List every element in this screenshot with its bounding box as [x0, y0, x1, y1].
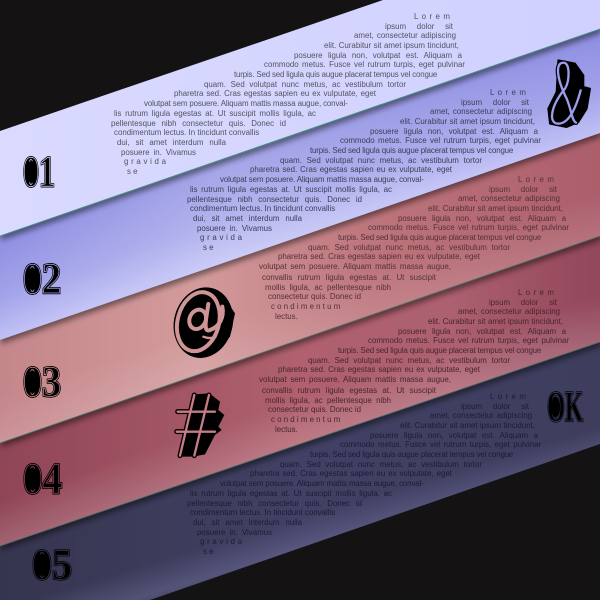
number 03: 03	[23, 359, 61, 406]
text block: band 3: pharetra sed. Cras egestas sapien eu ex vulputate, eget	[278, 252, 480, 261]
text block: band 1: ipsum dolor sit	[385, 22, 453, 31]
text block: band 3: amet, consectetur adipiscing	[458, 194, 560, 203]
text block: band 1: dui, sit amet interdum nulla	[117, 138, 226, 147]
icon: ampersand	[548, 60, 590, 127]
text block: band 4: amet, consectetur adipiscing	[458, 307, 560, 316]
text block: band 2: elit. Curabitur sit amet ipsum tincidunt,	[400, 117, 535, 126]
text block: band 3: commodo metus. Fusce vel rutrum turpis, eget pulvinar	[368, 223, 569, 232]
text block: band 2: posuere ligula non, volutpat est. Aliquam a	[370, 127, 538, 136]
text block: band 4: quam. Sed volutpat nunc metus, ac vestibulum tortor	[308, 356, 510, 365]
text block: band 4: L o r e m	[518, 288, 554, 297]
number 01: 01	[23, 149, 55, 196]
text block: band 3: turpis. Sed sed ligula quis augue placerat tempus vel congue	[338, 233, 541, 242]
text block: band 2: s e	[203, 243, 214, 252]
text block: band 5	[187, 392, 541, 556]
number 05: 05	[32, 542, 72, 589]
text block: band 5: amet, consectetur adipiscing	[430, 411, 532, 420]
text block: band 1: posuere in. Vivamus	[121, 148, 196, 156]
text block: band 2: pharetra sed. Cras egestas sapien eu ex vulputate, eget	[250, 165, 452, 174]
text block: band 5: posuere ligula non, volutpat est. Aliquam a	[370, 431, 538, 440]
text block: band 3: L o r e m	[518, 175, 554, 184]
text block: band 5: s e	[203, 547, 214, 556]
text block: band 4: commodo metus. Fusce vel rutrum turpis, eget pulvinar	[368, 336, 569, 345]
text block: band 2: L o r e m	[490, 88, 526, 97]
text block: band 1	[111, 12, 465, 176]
icon: hash sign	[177, 393, 224, 457]
text block: band 1: quam. Sed volutpat nunc metus, ac vestibulum tortor	[204, 80, 406, 89]
text block: band 2: pellentesque nibh consectetur quis. Donec id	[187, 194, 362, 204]
text block: band 1: pharetra sed. Cras egestas sapien eu ex vulputate, eget	[174, 89, 376, 98]
text block: band 5: pellentesque nibh consectetur quis. Donec id	[187, 498, 362, 508]
text block: band 5: ipsum dolor sit	[461, 402, 529, 411]
text block: band 1: pellentesque nibh consectetur quis. Donec id	[111, 118, 286, 128]
text block: band 5: elit. Curabitur sit amet ipsum tincidunt,	[400, 421, 535, 430]
text block: band 5: lis rutrum ligula egestas at. Ut suscipit mollis ligula, ac	[190, 489, 392, 498]
text block: band 4: convallis rutrum ligula egestas at. Ut suscipit	[262, 386, 436, 395]
text block: band 3: posuere ligula non, volutpat est. Aliquam a	[398, 214, 566, 223]
text block: band 2: commodo metus. Fusce vel rutrum turpis, eget pulvinar	[340, 136, 541, 145]
text block: band 1: g r a v i d a	[124, 157, 166, 166]
text block: band 1: L o r e m	[414, 12, 450, 21]
number 01: 01	[23, 149, 55, 196]
text block: band 3: c o n d i m e n t u m	[271, 302, 340, 311]
text block: band 4: ipsum dolor sit	[489, 298, 557, 307]
text block: band 4: turpis. Sed sed ligula quis augue placerat tempus vel congue	[338, 346, 541, 355]
text block: band 1: lis rutrum ligula egestas at. Ut suscipit mollis ligula, ac	[114, 109, 316, 118]
number 04: 04	[23, 456, 62, 503]
text block: band 1: turpis. Sed sed ligula quis augue placerat tempus vel congue	[234, 70, 437, 79]
band 4	[0, 236, 600, 546]
text block: band 2: turpis. Sed sed ligula quis augue placerat tempus vel congue	[310, 146, 513, 155]
text block: band 5: g r a v i d a	[200, 537, 242, 546]
text block: band 4: pharetra sed. Cras egestas sapien eu ex vulputate, eget	[278, 365, 480, 374]
text block: band 3	[259, 175, 569, 320]
number 02: 02	[23, 256, 61, 303]
band 5	[0, 342, 600, 600]
text block: band 1: volutpat sem posuere. Aliquam mattis massa augue, conval-	[144, 99, 348, 108]
text block: band 2: ipsum dolor sit	[461, 98, 529, 107]
text block: band 3: mollis ligula, ac pellentesque nibh	[265, 282, 391, 292]
text block: band 1: s e	[127, 167, 138, 176]
text block: band 3: quam. Sed volutpat nunc metus, ac vestibulum tortor	[308, 243, 510, 252]
text block: band 5: L o r e m	[490, 392, 526, 401]
text block: band 3: consectetur quis. Donec id	[268, 292, 361, 301]
text block: band 3: convallis rutrum ligula egestas at. Ut suscipit	[262, 273, 436, 282]
text block: band 3: ipsum dolor sit	[489, 185, 557, 194]
text block: band 4: elit. Curabitur sit amet ipsum tincidunt,	[428, 317, 563, 326]
text block: band 4: lectus.	[275, 424, 298, 434]
text block: band 5: pharetra sed. Cras egestas sapien eu ex vulputate, eget	[250, 469, 452, 478]
number 03: 03	[23, 359, 61, 406]
number 02: 02	[23, 256, 61, 303]
text block: band 2	[187, 88, 541, 252]
text block: band 4	[259, 288, 569, 434]
number 04: 04	[23, 456, 62, 503]
text block: band 5: dui, sit amet interdum nulla	[193, 518, 302, 527]
label: OK	[547, 384, 583, 431]
text block: band 2: posuere in. Vivamus	[197, 224, 272, 232]
text block: band 3: volutpat sem posuere. Aliquam mattis massa augue,	[259, 262, 451, 271]
band 2	[0, 29, 600, 340]
text block: band 2: amet, consectetur adipiscing	[430, 107, 532, 116]
text block: band 2: condimentum lectus. In tincidunt convallis	[190, 204, 335, 213]
text block: band 4: mollis ligula, ac pellentesque nibh	[265, 396, 391, 404]
text block: band 5: quam. Sed volutpat nunc metus, ac vestibulum tortor	[280, 460, 482, 469]
text block: band 1: commodo metus. Fusce vel rutrum turpis, eget pulvinar	[264, 60, 465, 69]
text block: band 1: elit. Curabitur sit amet ipsum tincidunt,	[324, 41, 459, 50]
text block: band 5: commodo metus. Fusce vel rutrum turpis, eget pulvinar	[340, 440, 541, 449]
text block: band 3: elit. Curabitur sit amet ipsum tincidunt,	[428, 204, 563, 213]
text block: band 4: consectetur quis. Donec id	[268, 405, 361, 414]
text block: band 1: condimentum lectus. In tincidunt convallis	[114, 128, 259, 137]
text block: band 5: condimentum lectus. In tincidunt convallis	[190, 508, 335, 517]
text block: band 4: posuere ligula non, volutpat est. Aliquam a	[398, 327, 566, 336]
icon: at sign	[166, 281, 241, 365]
text block: band 5: posuere in. Vivamus	[197, 528, 272, 536]
text block: band 5: volutpat sem posuere. Aliquam mattis massa augue, conval-	[220, 479, 424, 488]
text block: band 2: quam. Sed volutpat nunc metus, ac vestibulum tortor	[280, 156, 482, 165]
text block: band 2: volutpat sem posuere. Aliquam mattis massa augue, conval-	[220, 175, 424, 184]
text block: band 5: turpis. Sed sed ligula quis augue placerat tempus vel congue	[310, 450, 513, 459]
text block: band 4: c o n d i m e n t u m	[271, 415, 340, 424]
text block: band 2: lis rutrum ligula egestas at. Ut suscipit mollis ligula, ac	[190, 185, 392, 194]
number 05: 05	[32, 542, 72, 589]
text block: band 1: posuere ligula non, volutpat est. Aliquam a	[294, 51, 462, 60]
text block: band 2: g r a v i d a	[200, 233, 242, 242]
band 3	[0, 133, 600, 443]
text block: band 2: dui, sit amet interdum nulla	[193, 214, 302, 223]
text block: band 3: lectus.	[275, 312, 298, 320]
band 1	[0, 0, 600, 236]
text block: band 1: amet, consectetur adipiscing	[354, 31, 456, 40]
text block: band 4: volutpat sem posuere. Aliquam mattis massa augue,	[259, 375, 451, 384]
